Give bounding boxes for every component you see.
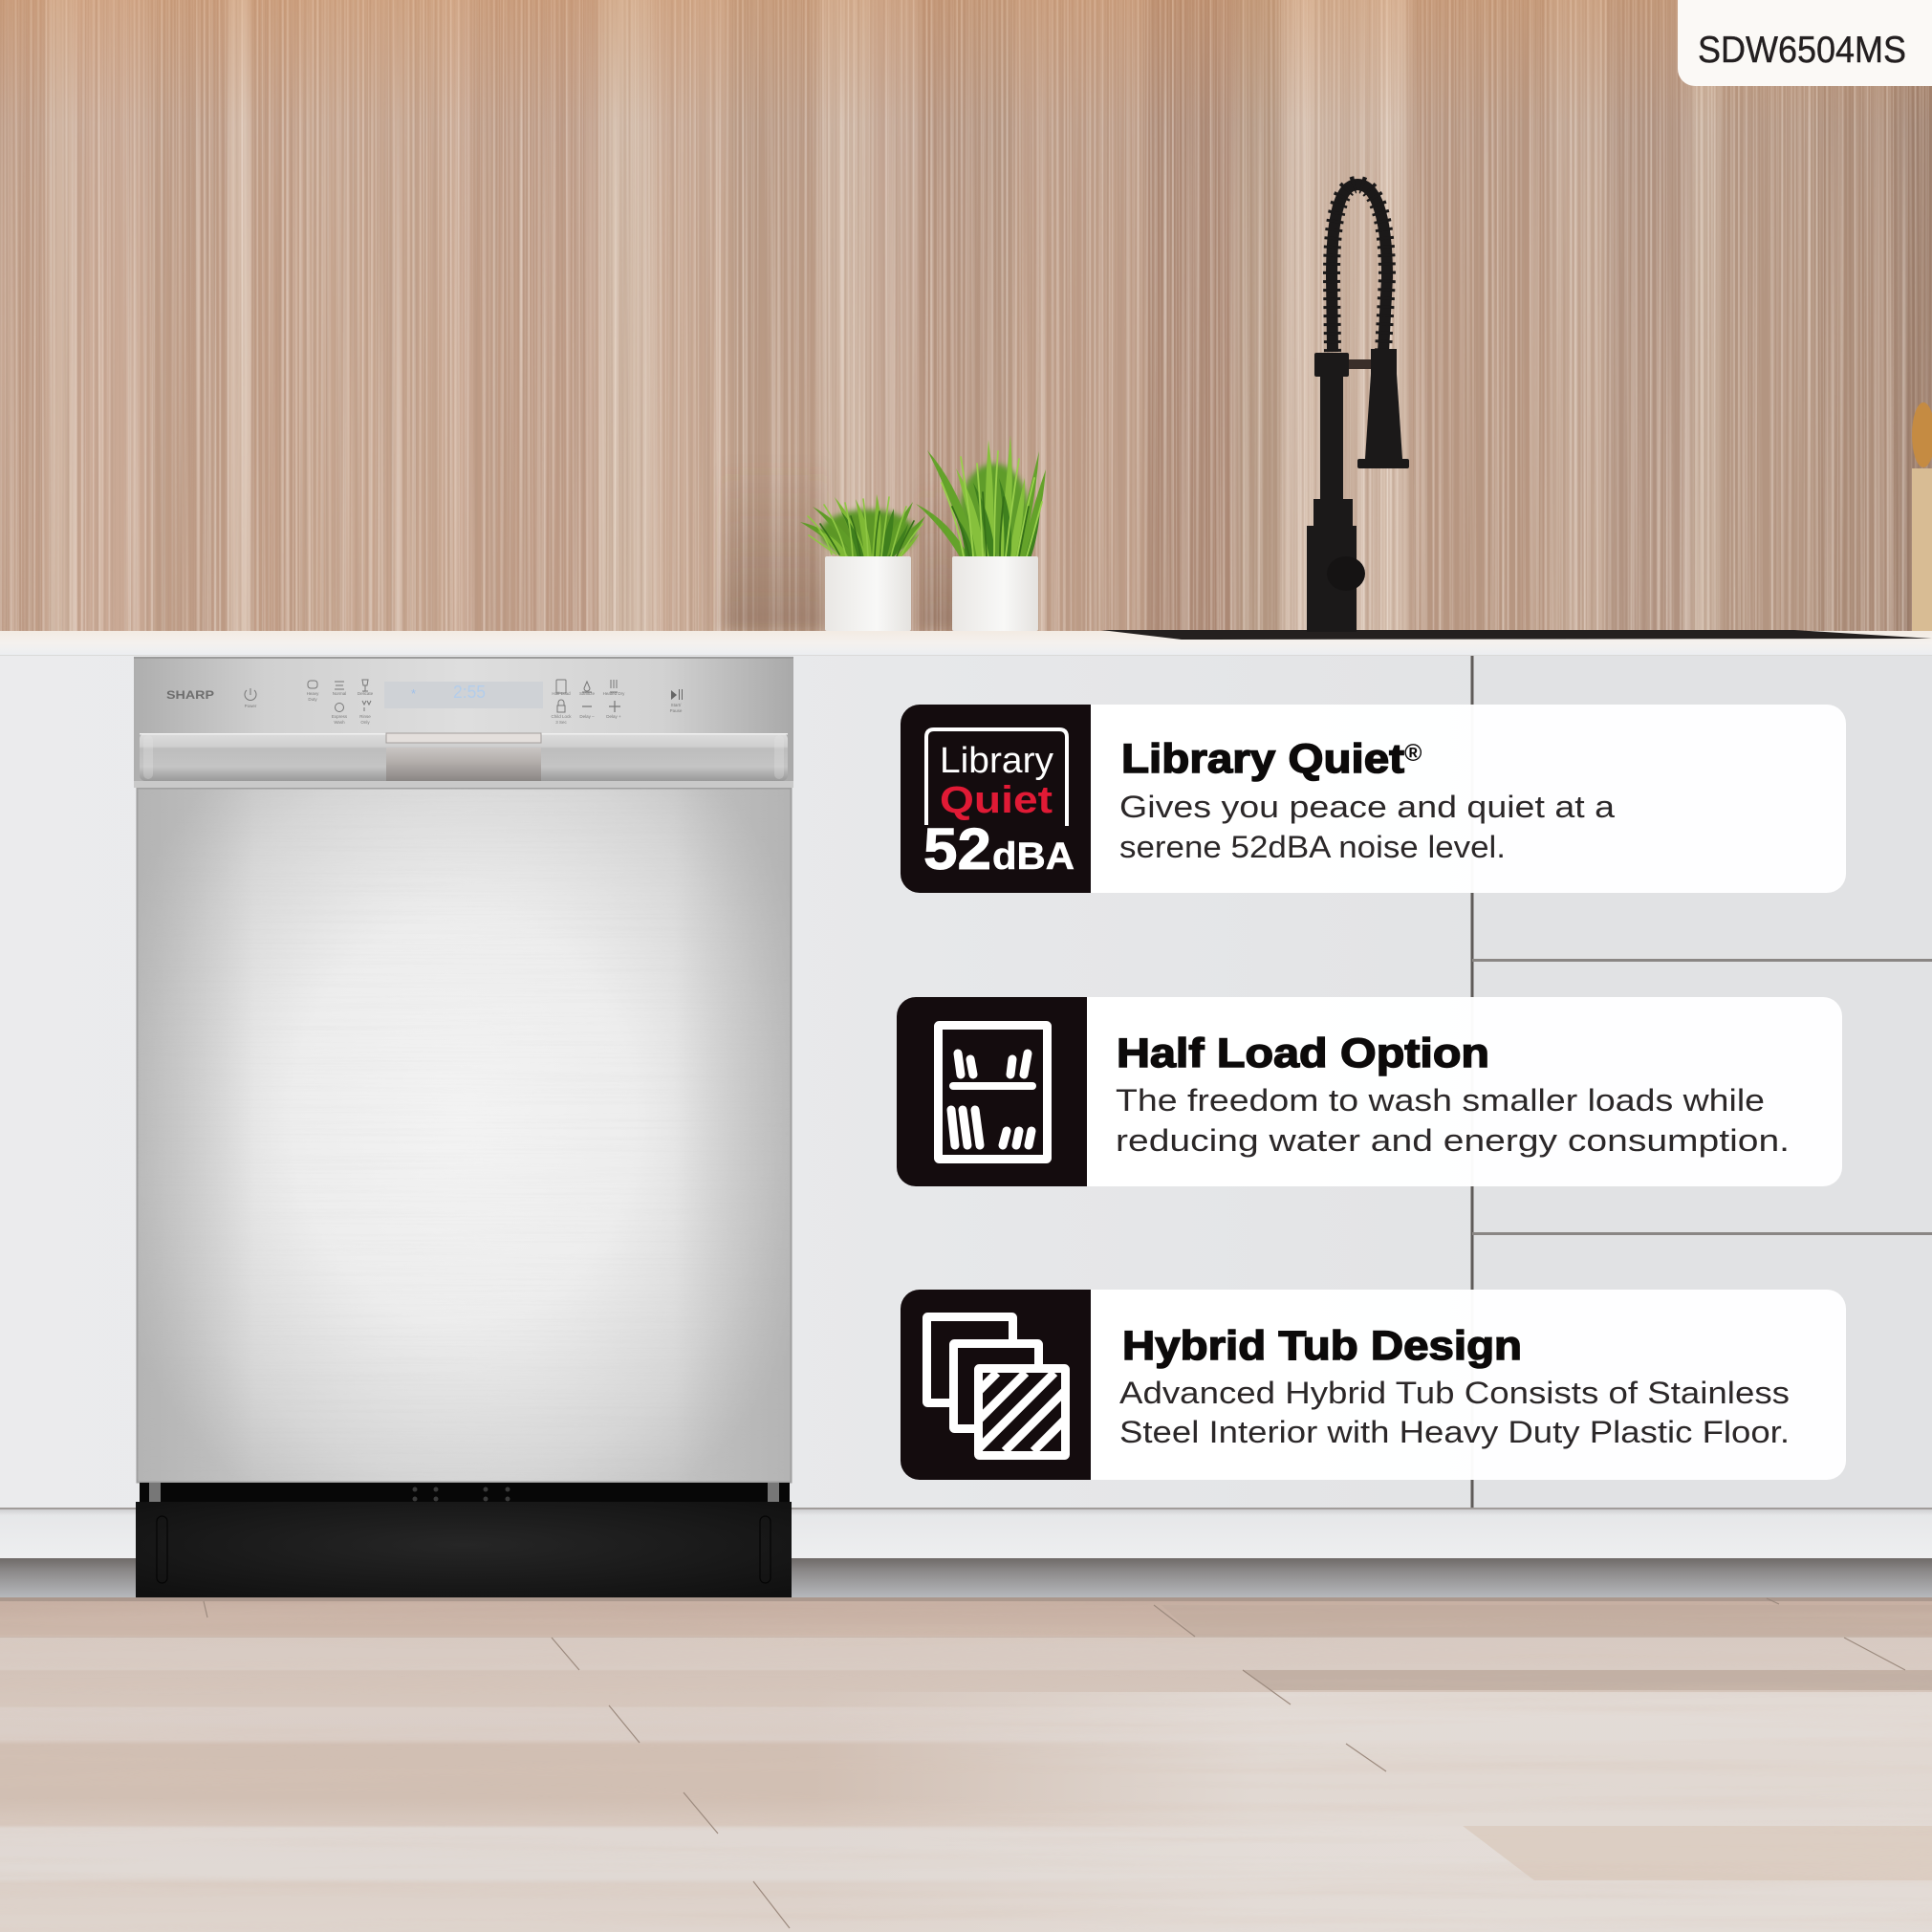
control labels: Power bbox=[245, 704, 257, 708]
kick plate bbox=[136, 1502, 792, 1597]
model tag: SDW6504MS bbox=[1698, 30, 1906, 71]
control labels: Express bbox=[332, 714, 348, 719]
icon: dish rack half load bbox=[897, 997, 1087, 1186]
plant: small potted grass bbox=[800, 494, 925, 558]
wood wall panel bbox=[0, 0, 1932, 633]
pot: right bbox=[952, 556, 1038, 631]
description: serene 52dBA noise level. bbox=[1119, 830, 1506, 864]
icon: library quiet 52dBA badge bbox=[901, 705, 1091, 893]
sink rim bbox=[1101, 630, 1932, 640]
control labels: Heated Dry bbox=[603, 691, 625, 696]
floor bbox=[0, 1597, 1932, 1932]
panel: hybrid tub design bbox=[901, 1290, 1846, 1480]
icon: library quiet 52dBA badge: Quiet bbox=[940, 779, 1053, 821]
plant: tall potted grass bbox=[916, 435, 1046, 559]
description bbox=[1119, 1376, 1790, 1449]
door handle bbox=[134, 733, 793, 788]
control labels: Only bbox=[360, 720, 370, 725]
control icons bbox=[245, 680, 620, 712]
display window: * bbox=[411, 686, 416, 701]
control labels: Delay – bbox=[579, 714, 595, 719]
display window: 2:55 bbox=[453, 683, 486, 702]
control labels: Delay + bbox=[606, 714, 621, 719]
utensil holder bbox=[1912, 402, 1932, 631]
control labels: Half Load bbox=[552, 691, 571, 696]
control labels: Heavy bbox=[307, 691, 319, 696]
control console bbox=[134, 657, 793, 788]
description: Advanced Hybrid Tub Consists of Stainless bbox=[1119, 1376, 1790, 1410]
dishwasher bbox=[134, 657, 793, 1597]
faucet bbox=[1307, 185, 1409, 632]
control labels: Start/ bbox=[671, 703, 682, 707]
black gap bbox=[140, 1483, 790, 1503]
control labels: Normal bbox=[333, 691, 346, 696]
heading: ® bbox=[1404, 740, 1422, 767]
control labels: Rinse bbox=[359, 714, 371, 719]
control labels: Delicate bbox=[358, 691, 374, 696]
brand logo: SHARP bbox=[166, 688, 214, 702]
description bbox=[1119, 790, 1615, 864]
panel: half load option bbox=[897, 997, 1842, 1186]
control labels: Pause bbox=[670, 708, 683, 713]
heading: Hybrid Tub Design bbox=[1122, 1323, 1522, 1369]
icon: layered tub squares bbox=[901, 1290, 1112, 1480]
control labels: Wash bbox=[334, 720, 345, 725]
control labels: Child Lock bbox=[551, 714, 572, 719]
control labels: 3 Sec bbox=[555, 720, 567, 725]
description bbox=[1116, 1083, 1790, 1158]
control labels: Duty bbox=[308, 697, 317, 702]
door panel bbox=[137, 788, 792, 1483]
control labels bbox=[245, 691, 683, 725]
heading: Library Quiet bbox=[1121, 736, 1404, 782]
description: Gives you peace and quiet at a bbox=[1119, 790, 1615, 824]
cabinets bbox=[0, 656, 1932, 1597]
model tag bbox=[1678, 0, 1932, 86]
pot: left bbox=[825, 556, 911, 631]
heading: Half Load Option bbox=[1117, 1031, 1489, 1076]
icon: library quiet 52dBA badge: 52 bbox=[923, 816, 991, 881]
icon: library quiet 52dBA badge: Library bbox=[940, 741, 1053, 781]
start pause icon bbox=[671, 689, 683, 700]
description: Steel Interior with Heavy Duty Plastic Floor. bbox=[1119, 1415, 1790, 1449]
description: The freedom to wash smaller loads while bbox=[1116, 1083, 1765, 1118]
display window bbox=[384, 682, 543, 708]
icon: library quiet 52dBA badge: dBA bbox=[992, 836, 1075, 878]
control labels: Sanitize bbox=[579, 691, 595, 696]
countertop bbox=[0, 631, 1932, 656]
panel: library quiet bbox=[901, 705, 1846, 893]
description: reducing water and energy consumption. bbox=[1116, 1123, 1790, 1158]
